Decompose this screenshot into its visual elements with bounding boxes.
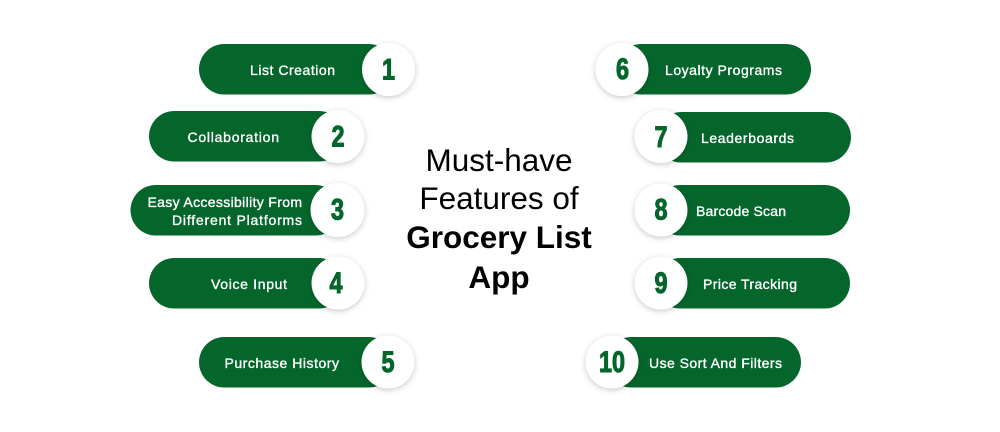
feature 10: Use Sort And Filters xyxy=(586,336,801,388)
feature 6: Loyalty Programs: Loyalty Programs xyxy=(665,62,782,78)
feature 1: List Creation xyxy=(199,43,415,96)
feature 3: Easy Accessibility From Different Platforms: Different Platforms xyxy=(172,212,302,228)
feature 6: Loyalty Programs xyxy=(596,43,811,96)
feature 10: Use Sort And Filters: 10 xyxy=(599,345,625,379)
feature 1: List Creation: List Creation xyxy=(250,62,335,78)
title xyxy=(406,142,592,295)
feature 3: Easy Accessibility From Different Platforms: 3 xyxy=(331,193,344,226)
feature 7: Leaderboards: Leaderboards xyxy=(701,130,794,146)
feature 3: Easy Accessibility From Different Platforms xyxy=(130,183,364,237)
feature 4: Voice Input: 4 xyxy=(329,266,343,300)
feature 7: Leaderboards xyxy=(634,110,851,163)
feature 7: Leaderboards: 7 xyxy=(654,120,668,154)
feature 2: Collaboration: Collaboration xyxy=(188,129,279,145)
feature 9: Price Tracking: 9 xyxy=(654,266,668,300)
feature 9: Price Tracking: Price Tracking xyxy=(703,276,797,292)
feature 4: Voice Input xyxy=(149,256,364,310)
feature 2: Collaboration xyxy=(149,110,364,163)
feature 4: Voice Input: Voice Input xyxy=(211,276,287,292)
feature 1: List Creation: 1 xyxy=(382,53,395,86)
feature 8: Barcode Scan: 8 xyxy=(654,193,668,226)
feature 8: Barcode Scan xyxy=(634,184,850,236)
feature 8: Barcode Scan: Barcode Scan xyxy=(696,203,786,219)
feature 2: Collaboration: 2 xyxy=(331,120,345,153)
feature 9: Price Tracking xyxy=(634,256,850,310)
feature 5: Purchase History xyxy=(199,336,414,388)
feature 3: Easy Accessibility From Different Platforms: Easy Accessibility From xyxy=(148,194,302,210)
feature 5: Purchase History: 5 xyxy=(381,345,395,379)
title: Features of xyxy=(419,180,579,216)
title: Must-have xyxy=(425,142,573,178)
feature 5: Purchase History: Purchase History xyxy=(224,355,339,371)
feature 10: Use Sort And Filters: Use Sort And Filters xyxy=(649,355,782,371)
title: Grocery List xyxy=(406,219,592,255)
feature 6: Loyalty Programs: 6 xyxy=(616,52,629,86)
title: App xyxy=(468,259,530,295)
